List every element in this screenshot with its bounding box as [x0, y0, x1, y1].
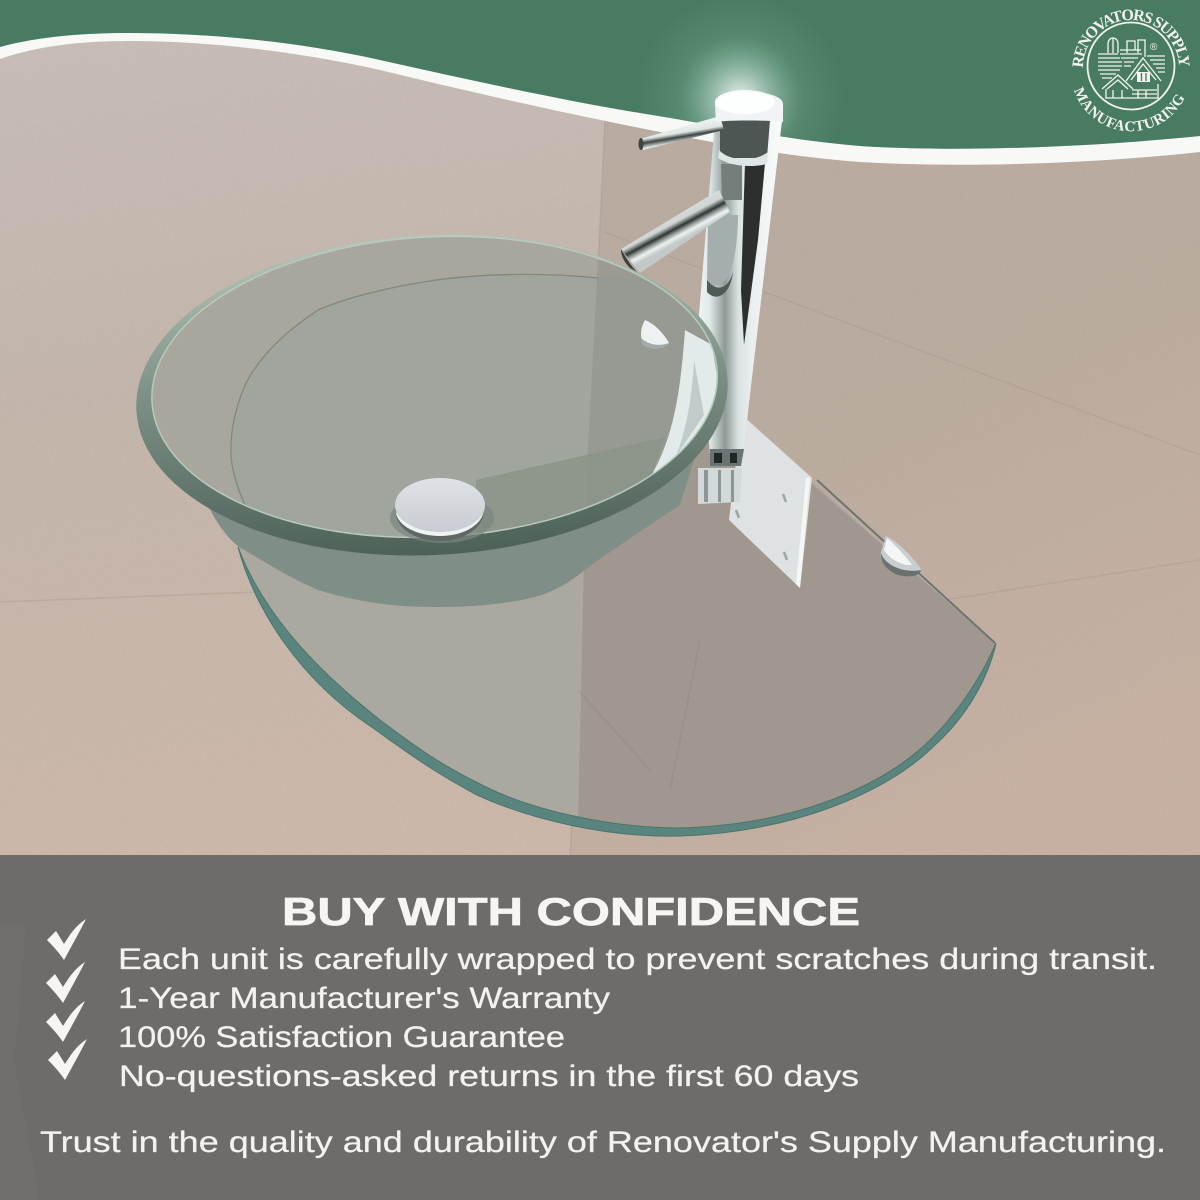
bullet 1: Each unit is carefully wrapped to prevent scratches during transit. — [118, 943, 1157, 976]
shelf clip left — [641, 320, 669, 349]
bowl interior — [230, 260, 716, 536]
faucet collar — [720, 120, 770, 158]
rim highlight — [144, 222, 725, 551]
logo arc text top — [1083, 20, 1179, 68]
logo: Renovators Supply Manufacturing — [1072, 9, 1190, 132]
lower wall — [1106, 84, 1158, 98]
logo window — [1137, 72, 1150, 82]
bowl rim — [128, 220, 736, 570]
faucet reflection in bowl — [652, 330, 716, 474]
shelf: glass quarter round — [238, 300, 996, 836]
faucet base — [698, 468, 742, 504]
logo arc text bottom — [1074, 90, 1188, 131]
check 1 — [47, 919, 86, 960]
check 2 — [46, 962, 85, 1003]
shelf back edge — [817, 480, 995, 643]
logo: Renovators Supply Manufacturing: MANUFACTURING — [1074, 86, 1184, 132]
heading: BUY WITH CONFIDENCE — [282, 891, 860, 934]
background: tiled wall — [0, 0, 1200, 860]
bullet 3: 100% Satisfaction Guarantee — [118, 1021, 565, 1054]
drain — [390, 478, 494, 543]
bowl inner base — [232, 275, 597, 536]
faucet lower band — [710, 449, 744, 466]
basin: glass vessel bowl — [128, 220, 740, 607]
main roof stripes — [1120, 50, 1165, 72]
logo: Renovators Supply Manufacturing: RENOVATORS SUPPLY — [1072, 9, 1190, 68]
faucet cap — [715, 92, 783, 122]
green band — [0, 0, 1200, 149]
check 3 — [46, 1001, 85, 1042]
check 4 — [48, 1039, 87, 1080]
bowl shadow wedge — [476, 438, 664, 532]
drain collar — [390, 493, 494, 543]
lower gable — [1102, 75, 1133, 89]
info panel — [0, 855, 1200, 1200]
white wave stripe — [0, 33, 1200, 165]
shelf edge — [238, 547, 996, 836]
silo — [1108, 38, 1118, 53]
faucet spout — [621, 190, 730, 273]
shelf reflection lines — [578, 640, 700, 790]
faucet handle — [640, 116, 724, 150]
mounting bracket plate — [729, 415, 812, 588]
front gable — [1126, 58, 1161, 81]
shelf darker wall side — [578, 300, 995, 833]
faucet highlight — [715, 90, 775, 114]
chimneys — [1127, 40, 1145, 57]
checklist icons — [46, 919, 87, 1080]
logo house drawing — [1098, 38, 1165, 98]
shelf glass surface — [238, 330, 995, 833]
bowl underside — [195, 440, 700, 607]
panel faint background shapes — [0, 925, 40, 1200]
faucet — [621, 90, 783, 504]
logo registered mark: ® — [1150, 42, 1158, 53]
logo ring — [1088, 22, 1174, 110]
faucet body — [699, 108, 783, 455]
faucet glow on band — [630, 0, 850, 144]
drain cap — [395, 478, 485, 532]
logo window bars — [1142, 73, 1146, 81]
bullet 2: 1-Year Manufacturer's Warranty — [118, 982, 610, 1015]
bullet 4: No-questions-asked returns in the first 60 days — [119, 1060, 859, 1093]
faucet dark reflection — [741, 163, 765, 345]
shelf clip right — [881, 536, 921, 576]
bracket screws — [736, 494, 787, 560]
bowl outer ellipse — [128, 220, 736, 570]
bowl darker wall side — [588, 260, 716, 472]
left roof stripes — [1098, 54, 1122, 78]
bowl arc line — [231, 274, 598, 505]
header: green wave band — [0, 0, 1200, 165]
closing line: Trust in the quality and durability of Renovator's Supply Manufacturing. — [40, 1126, 1166, 1159]
